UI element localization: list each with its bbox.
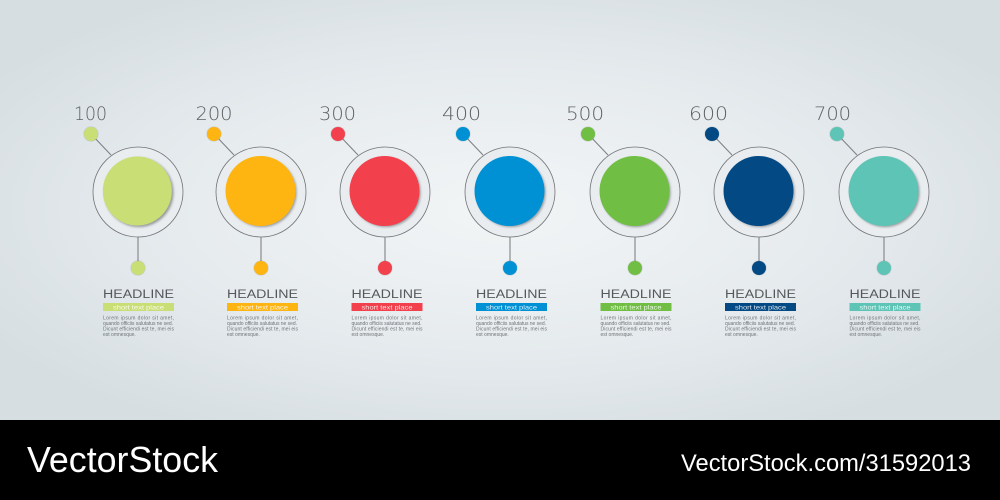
bottom dot bbox=[877, 261, 891, 275]
body text: Lorem ipsum dolor sit amet, bbox=[850, 316, 920, 322]
body text: quando officiis salutatus ne sed. bbox=[476, 321, 546, 327]
connector lines bbox=[214, 134, 261, 268]
connector lines bbox=[712, 134, 759, 268]
top dot bbox=[830, 127, 844, 141]
body text: Dicunt efficiendi est te, mei eis bbox=[725, 326, 796, 332]
body text bbox=[352, 316, 423, 338]
step 400 bbox=[442, 104, 555, 338]
headline: HEADLINE bbox=[850, 289, 921, 301]
bottom dot bbox=[752, 261, 766, 275]
body text: Dicunt efficiendi est te, mei eis bbox=[227, 326, 298, 332]
step 500 bbox=[566, 104, 680, 338]
body text: Lorem ipsum dolor sit amet, bbox=[352, 316, 422, 322]
subtitle text: short text place bbox=[237, 304, 288, 311]
step 100 bbox=[74, 104, 183, 338]
bottom dot bbox=[131, 261, 145, 275]
number label: 700 bbox=[814, 104, 851, 125]
subtitle bar bbox=[476, 303, 547, 311]
disc bbox=[103, 156, 172, 226]
number label: 500 bbox=[566, 104, 604, 125]
step 300 bbox=[319, 104, 430, 338]
ring bbox=[465, 147, 555, 237]
bottom dot bbox=[503, 261, 517, 275]
disc bbox=[600, 156, 670, 226]
footer url text: VectorStock.com/31592013 bbox=[681, 450, 971, 477]
step 200 bbox=[196, 104, 306, 338]
number label: 600 bbox=[689, 104, 728, 125]
bottom dot bbox=[254, 261, 268, 275]
disc shadow bbox=[104, 158, 174, 227]
body text: Lorem ipsum dolor sit amet, bbox=[103, 316, 174, 322]
body text: Dicunt efficiendi est te, mei eis bbox=[352, 326, 423, 332]
body text: est omnesque. bbox=[352, 332, 384, 338]
top dot bbox=[331, 127, 345, 141]
top dot bbox=[207, 127, 221, 141]
headline: HEADLINE bbox=[476, 289, 547, 301]
top dot bbox=[456, 127, 470, 141]
disc shadow bbox=[476, 158, 546, 227]
subtitle bar bbox=[352, 303, 422, 311]
connector lines bbox=[338, 134, 385, 268]
step 600 bbox=[689, 104, 804, 338]
body text bbox=[850, 316, 921, 338]
headline: HEADLINE bbox=[227, 289, 298, 301]
ring bbox=[839, 147, 929, 237]
body text: quando officiis salutatus ne sed. bbox=[103, 321, 173, 327]
connector lines bbox=[463, 134, 510, 268]
subtitle text: short text place bbox=[860, 304, 911, 311]
connector lines bbox=[837, 134, 884, 268]
top dot bbox=[84, 127, 98, 141]
body text bbox=[600, 316, 672, 338]
disc bbox=[226, 156, 296, 226]
subtitle bar bbox=[103, 303, 174, 311]
body text: Dicunt efficiendi est te, mei eis bbox=[476, 326, 548, 332]
disc shadow bbox=[352, 158, 420, 227]
disc shadow bbox=[850, 158, 920, 227]
top dot bbox=[705, 127, 719, 141]
body text: est omnesque. bbox=[600, 332, 633, 338]
body text: Lorem ipsum dolor sit amet, bbox=[227, 316, 298, 322]
body text: Lorem ipsum dolor sit amet, bbox=[476, 316, 547, 322]
headline: HEADLINE bbox=[600, 289, 672, 301]
footer logo text: VectorStock bbox=[27, 439, 219, 480]
body text: quando officiis salutatus ne sed. bbox=[227, 321, 297, 327]
subtitle bar bbox=[227, 303, 298, 311]
disc bbox=[848, 156, 918, 226]
subtitle bar bbox=[600, 303, 672, 311]
step 700 bbox=[814, 104, 929, 338]
bottom dot bbox=[628, 261, 642, 275]
body text: Lorem ipsum dolor sit amet, bbox=[600, 316, 672, 322]
body text bbox=[476, 316, 548, 338]
connector lines bbox=[91, 134, 138, 268]
footer bar bbox=[0, 420, 1000, 500]
ring bbox=[93, 147, 183, 237]
number label: 200 bbox=[196, 104, 232, 125]
body text: quando officiis salutatus ne sed. bbox=[850, 321, 920, 327]
body text: est omnesque. bbox=[725, 332, 758, 338]
number label: 400 bbox=[442, 104, 481, 125]
disc bbox=[724, 156, 794, 226]
headline: HEADLINE bbox=[103, 289, 174, 301]
disc shadow bbox=[602, 158, 670, 227]
ring bbox=[216, 147, 306, 237]
disc bbox=[350, 156, 420, 226]
subtitle bar bbox=[850, 303, 920, 311]
body text bbox=[103, 316, 174, 338]
subtitle text: short text place bbox=[486, 304, 537, 311]
subtitle text: short text place bbox=[610, 304, 662, 311]
top dot bbox=[581, 127, 595, 141]
subtitle text: short text place bbox=[362, 304, 413, 311]
body text: Lorem ipsum dolor sit amet, bbox=[725, 316, 796, 322]
headline: HEADLINE bbox=[725, 289, 796, 301]
body text: quando officiis salutatus ne sed. bbox=[600, 321, 670, 327]
bottom dot bbox=[378, 261, 392, 275]
connector lines bbox=[588, 134, 635, 268]
headline: HEADLINE bbox=[352, 289, 423, 301]
ring bbox=[590, 147, 680, 237]
number label: 100 bbox=[74, 104, 107, 125]
disc shadow bbox=[228, 158, 296, 227]
body text: est omnesque. bbox=[103, 332, 136, 338]
subtitle text: short text place bbox=[113, 304, 164, 311]
body text: Dicunt efficiendi est te, mei eis bbox=[600, 326, 672, 332]
body text: est omnesque. bbox=[227, 332, 260, 338]
body text: quando officiis salutatus ne sed. bbox=[352, 321, 422, 327]
disc shadow bbox=[726, 158, 794, 227]
body text bbox=[725, 316, 796, 338]
ring bbox=[714, 147, 804, 237]
body text bbox=[227, 316, 298, 338]
subtitle bar bbox=[725, 303, 796, 311]
subtitle text: short text place bbox=[735, 304, 786, 311]
number label: 300 bbox=[319, 104, 356, 125]
ring bbox=[340, 147, 430, 237]
body text: Dicunt efficiendi est te, mei eis bbox=[850, 326, 921, 332]
body text: quando officiis salutatus ne sed. bbox=[725, 321, 795, 327]
body text: Dicunt efficiendi est te, mei eis bbox=[103, 326, 174, 332]
disc bbox=[474, 156, 544, 226]
body text: est omnesque. bbox=[476, 332, 509, 338]
body text: est omnesque. bbox=[850, 332, 882, 338]
